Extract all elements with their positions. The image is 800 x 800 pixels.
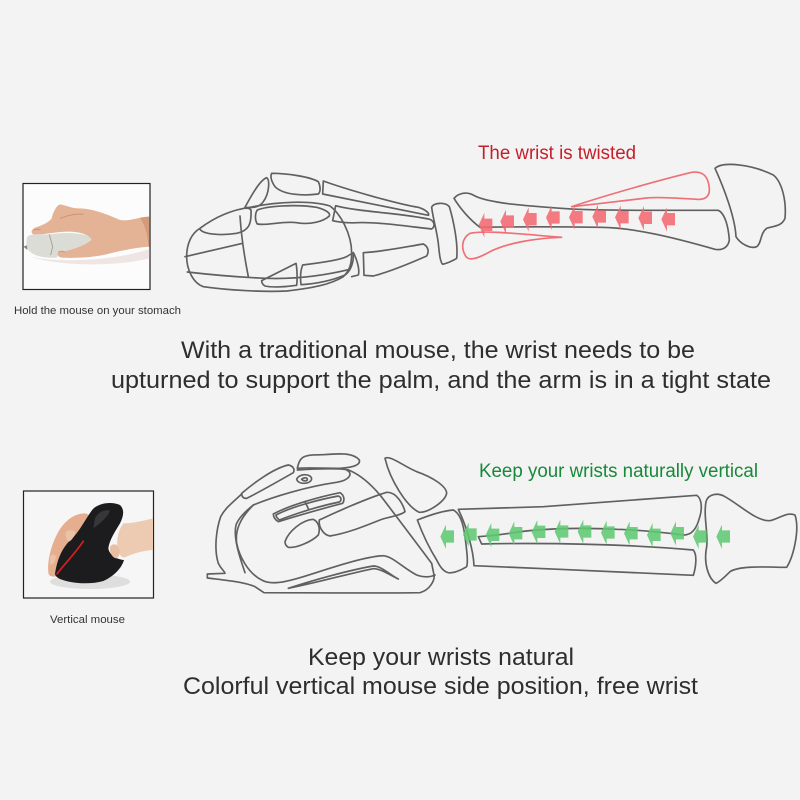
label: keep wrists vertical: Keep your wrists naturally vertical — [479, 461, 758, 482]
text: traditional mouse explanation: With a traditional mouse, the wrist needs to be — [181, 337, 695, 364]
red muscle outlines — [463, 172, 709, 259]
caption: vertical mouse: Vertical mouse — [50, 614, 125, 626]
diagram: hand bones, vertical — [207, 454, 447, 593]
panel: vertical mouse — [24, 454, 797, 700]
text: traditional mouse explanation — [111, 337, 771, 394]
icon: red arrows — [479, 205, 675, 237]
photo: hand on vertical mouse — [24, 491, 154, 598]
caption: hold the mouse: Hold the mouse on your stomach — [14, 305, 181, 317]
icon: green arrows — [440, 520, 730, 549]
panel: traditional mouse — [14, 143, 785, 394]
text: vertical mouse explanation: Colorful vertical mouse side position, free wrist — [183, 673, 698, 700]
diagram: forearm bones, traditional — [454, 164, 785, 259]
photo: hand on traditional mouse — [23, 184, 150, 290]
text: traditional mouse explanation: upturned to support the palm, and the arm is in a tight state — [111, 367, 771, 394]
diagram: forearm bones, vertical — [417, 494, 797, 583]
text: vertical mouse explanation — [183, 644, 698, 700]
text: vertical mouse explanation: Keep your wrists natural — [308, 644, 574, 671]
diagram: hand bones, traditional — [185, 173, 457, 291]
label: the wrist is twisted: The wrist is twisted — [478, 143, 636, 164]
